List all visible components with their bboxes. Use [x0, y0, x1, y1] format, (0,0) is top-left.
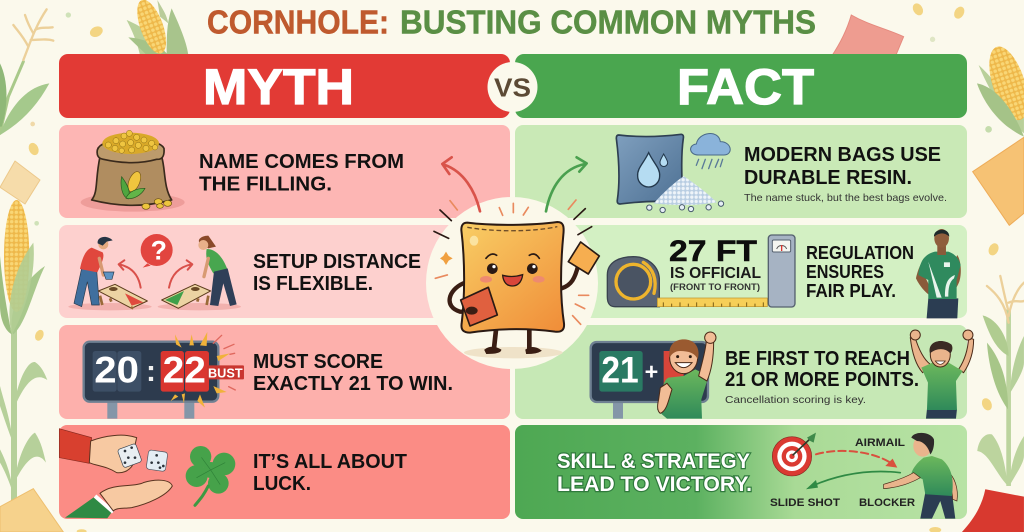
- text: fact 3: Cancellation scoring is key.: [725, 394, 866, 406]
- text: fact 3: BE FIRST TO REACH: [725, 348, 910, 370]
- text: myth 1: [199, 151, 404, 196]
- text: fact 2: REGULATION: [806, 243, 914, 263]
- text: myth 1: NAME COMES FROM: [199, 151, 404, 173]
- arrow: to myth: [442, 157, 480, 211]
- icon: player throwing: [884, 433, 957, 519]
- text: fact 2: [806, 243, 914, 301]
- icon: hands and dice: [59, 429, 235, 518]
- text: fact 2: ENSURES: [806, 262, 884, 282]
- icon: two players and boards: ?: [151, 235, 167, 265]
- panel: fact header: FACT: [677, 59, 814, 115]
- text: 27 ft official: [669, 235, 761, 293]
- arrow: to fact: [546, 157, 587, 211]
- mascot: smiling bean bag: [434, 200, 599, 358]
- mascot shadow: [464, 347, 563, 358]
- icon: scoreboard 20:22 bust: 20: [94, 350, 139, 391]
- panel: fact row 2: [515, 225, 967, 318]
- panel: fact header: [515, 54, 967, 118]
- mascot motion marks: [434, 200, 592, 324]
- decoration: top-left corn plant: [0, 9, 53, 135]
- text: 27 ft official: IS OFFICIAL: [670, 265, 761, 282]
- legs: [494, 330, 529, 348]
- text: fact 1: MODERN BAGS USE: [744, 144, 941, 166]
- panel: fact row 3: [515, 325, 974, 419]
- panel: myth row 2: [59, 225, 510, 318]
- icon: scoreboard 20:22 bust: [84, 332, 244, 419]
- decoration: right corn cob and bag: [973, 42, 1024, 225]
- body: [461, 222, 564, 333]
- decoration: top corn cob: [127, 0, 188, 57]
- text: myth 1: THE FILLING.: [199, 174, 332, 196]
- icon: resin bag, rain and pellets: [616, 133, 730, 213]
- panel: myth header: MYTH: [203, 59, 354, 115]
- icon: tape measure and gauge: [607, 235, 795, 307]
- arms: [450, 265, 578, 312]
- icon: cheering man: [910, 330, 974, 419]
- text: myth 4: IT’S ALL ABOUT: [253, 451, 407, 473]
- panel: myth row 1: [59, 125, 510, 218]
- text: myth 2: IS FLEXIBLE.: [253, 273, 373, 295]
- sparkle: [440, 252, 453, 265]
- text: fact 3: [725, 348, 919, 406]
- text: fact 4: [557, 450, 752, 496]
- decoration: bottom-right red bag: [962, 489, 1024, 532]
- title: CORNHOLE:: [207, 4, 389, 40]
- labels: shot types: AIRMAIL: [855, 437, 905, 449]
- text: fact 1: The name stuck, but the best bags evolve.: [744, 192, 947, 204]
- decoration: bottom-left bag: [0, 489, 63, 532]
- small orange bag: [568, 242, 599, 274]
- panel: fact row 4: [515, 425, 967, 519]
- text: 27 ft official: (FRONT TO FRONT): [670, 282, 760, 293]
- text: fact 4: SKILL & STRATEGY: [557, 450, 750, 473]
- text: myth 3: [253, 351, 453, 395]
- center circle: [426, 197, 598, 369]
- icon: scoreboard 20:22 bust: :: [146, 355, 156, 388]
- text: myth 2: [253, 251, 421, 295]
- title: BUSTING COMMON MYTHS: [400, 4, 816, 40]
- panel: myth row 3: [59, 325, 510, 419]
- icon: scoreboard 20:22 bust: 22: [163, 350, 206, 391]
- icon: scoreboard 20:22 bust: BUST: [208, 366, 243, 380]
- arrow: slide shot: [806, 472, 900, 489]
- text: fact 3: 21 OR MORE POINTS.: [725, 369, 919, 391]
- icon: sack of corn: [81, 130, 185, 212]
- labels: shot types: BLOCKER: [859, 497, 915, 509]
- text: fact 2: FAIR PLAY.: [806, 281, 896, 301]
- text: 27 ft official: 27 FT: [669, 235, 757, 268]
- decoration: left pale bag: [0, 161, 40, 204]
- face: [480, 254, 545, 286]
- title: [207, 4, 816, 40]
- labels: shot types: [770, 437, 915, 509]
- text: myth 4: LUCK.: [253, 473, 311, 495]
- vs badge: VS: [494, 72, 531, 102]
- arrow: airmail: [816, 451, 897, 468]
- text: fact 1: [744, 144, 947, 204]
- icon: scoreboard 21+ and cheering boy: [591, 332, 716, 419]
- panel: myth header: [59, 54, 510, 118]
- text: myth 4: [253, 451, 407, 495]
- decoration: pink bag: [831, 15, 904, 57]
- small red bag: [461, 287, 497, 326]
- icon: referee: [916, 229, 961, 318]
- text: fact 4: LEAD TO VICTORY.: [557, 473, 752, 496]
- text: fact 1: DURABLE RESIN.: [744, 167, 912, 189]
- decoration: left corn stalk: [0, 200, 47, 506]
- panel: myth row 4: [59, 425, 510, 519]
- icon: target with arrow: [772, 433, 816, 476]
- icon: scoreboard 21+ and cheering boy: 21: [601, 350, 639, 391]
- decoration: right corn stalk: [977, 276, 1024, 486]
- vs badge: [488, 62, 538, 112]
- labels: shot types: SLIDE SHOT: [770, 497, 840, 509]
- icon: two players and boards: [68, 234, 241, 310]
- panel: fact row 1: [515, 125, 967, 218]
- text: myth 2: SETUP DISTANCE: [253, 251, 421, 273]
- text: myth 3: MUST SCORE: [253, 351, 383, 373]
- icon: scoreboard 21+ and cheering boy: +: [645, 358, 658, 384]
- text: myth 3: EXACTLY 21 TO WIN.: [253, 373, 453, 395]
